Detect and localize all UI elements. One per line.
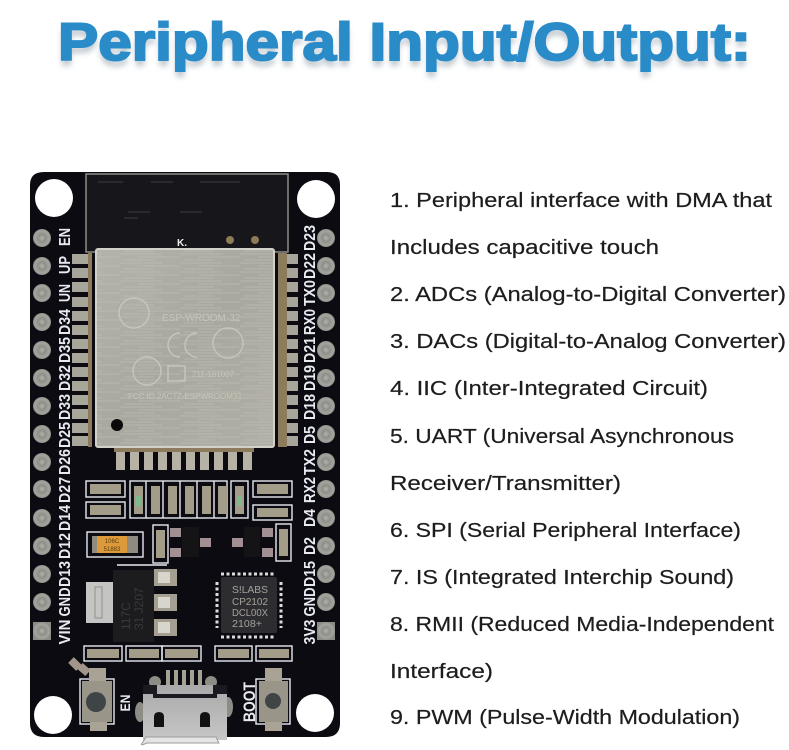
left pin labels: D13 <box>57 561 74 587</box>
item 9: 9. PWM (Pulse-Width Modulation) <box>390 707 740 729</box>
voltage regulator: 117C <box>119 602 133 630</box>
left module pads <box>72 253 92 447</box>
antenna area <box>86 174 288 252</box>
right pin labels: D18 <box>302 394 319 420</box>
right pin labels: D23 <box>302 225 319 251</box>
BOOT button: BOOT <box>240 682 259 722</box>
left pin labels <box>57 228 74 644</box>
left header pins <box>33 229 51 640</box>
right header pins <box>317 229 335 640</box>
right pin labels: D5 <box>302 426 319 444</box>
right pin labels: TX2 <box>302 449 319 475</box>
item 6: 6. SPI (Serial Peripheral Interface) <box>390 520 741 542</box>
panel: ESP32 development board <box>30 172 340 745</box>
item 3: 3. DACs (Digital-to-Analog Converter) <box>390 331 786 353</box>
CP2102 chip: CP2102 <box>232 597 268 608</box>
left pin labels: UP <box>57 256 74 274</box>
transistors <box>153 524 291 563</box>
item 4: 4. IIC (Inter-Integrated Circuit) <box>390 378 708 400</box>
left pin labels: UN <box>57 284 74 302</box>
right pin labels: D22 <box>302 253 319 279</box>
right pin labels: RX0 <box>302 309 319 335</box>
right pin labels: D4 <box>302 509 319 527</box>
right pin labels: RX2 <box>302 477 319 503</box>
CP2102 chip: DCL00X <box>232 608 268 619</box>
item 2: 2. ADCs (Analog-to-Digital Converter) <box>390 284 786 306</box>
BOOT button <box>240 668 290 731</box>
right pin labels: D15 <box>302 561 319 587</box>
SMD resistor row <box>86 481 292 520</box>
item 8: 8. RMII (Reduced Media-Independent <box>390 614 775 636</box>
item 8: Interface) <box>390 661 493 683</box>
tantalum capacitor <box>87 532 143 557</box>
right pin labels: D21 <box>302 337 319 363</box>
mounting holes <box>34 179 335 734</box>
item 8 <box>390 614 775 683</box>
item 1 <box>390 190 773 259</box>
board outline <box>30 172 340 737</box>
lower SMD row <box>84 646 292 661</box>
title: Peripheral Input/Output: <box>58 13 751 72</box>
left pin labels: D14 <box>57 505 74 531</box>
CP2102 chip: 2108+ <box>232 619 262 630</box>
CP2102 chip <box>217 574 281 637</box>
small diagonal capacitor <box>71 660 88 673</box>
right pin labels: D2 <box>302 537 319 555</box>
left pin labels: D35 <box>57 337 74 363</box>
title: Peripheral Input/Output: <box>58 19 751 78</box>
right pin labels <box>302 225 319 644</box>
EN button <box>80 668 133 731</box>
ESP-WROOM-32 shield: FCC ID:2AC7Z-ESPWROOM32 <box>128 392 242 401</box>
right pin labels: 3V3 <box>302 619 319 644</box>
ESP-WROOM-32 shield: ESP-WROOM-32 <box>162 313 241 324</box>
item 1: Includes capacitive touch <box>390 237 659 259</box>
item 5: 5. UART (Universal Asynchronous <box>390 426 734 448</box>
left pin labels: VIN <box>57 620 74 644</box>
EN button: EN <box>117 694 133 712</box>
text block: peripheral list <box>390 190 786 729</box>
left pin labels: D27 <box>57 477 74 503</box>
left pin labels: D32 <box>57 365 74 391</box>
item 1: 1. Peripheral interface with DMA that <box>390 190 773 212</box>
item 5: Receiver/Transmitter) <box>390 473 621 495</box>
right pin labels: D19 <box>302 365 319 391</box>
left pin labels: GND <box>57 588 74 616</box>
ESP-WROOM-32 shield: 211-161007 <box>192 370 235 379</box>
bottom module pads <box>114 448 254 470</box>
micro USB connector <box>135 670 233 745</box>
tantalum capacitor: 106C <box>105 539 120 545</box>
item 5 <box>390 426 734 495</box>
voltage regulator <box>86 565 177 642</box>
right module pads <box>278 253 298 447</box>
antenna area: K. <box>177 238 187 249</box>
ESP-WROOM-32 shield <box>96 249 274 447</box>
left pin labels: EN <box>57 228 74 246</box>
left pin labels: D25 <box>57 422 74 448</box>
voltage regulator: 31 J207 <box>132 587 146 630</box>
tantalum capacitor: 51883 <box>104 547 121 553</box>
left pin labels: D26 <box>57 449 74 475</box>
right pin labels: GND <box>302 588 319 616</box>
left pin labels: D12 <box>57 533 74 559</box>
item 7: 7. IS (Integrated Interchip Sound) <box>390 567 734 589</box>
CP2102 chip: S!LABS <box>232 585 268 596</box>
left pin labels: D33 <box>57 394 74 420</box>
left pin labels: D34 <box>57 309 74 335</box>
right pin labels: TX0 <box>302 280 319 306</box>
